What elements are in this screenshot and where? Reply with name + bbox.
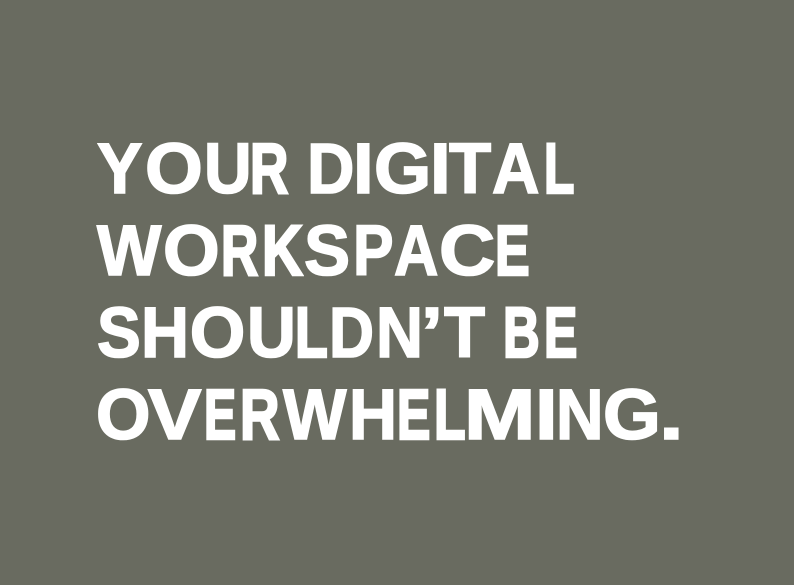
title line 1: R <box>250 128 288 208</box>
title line 2: P <box>353 210 394 290</box>
title line 1: I <box>353 128 373 208</box>
title line 2: W <box>97 210 161 290</box>
title line 2: O <box>163 210 219 290</box>
title line 3: B <box>503 293 540 373</box>
title line 2: S <box>304 210 351 290</box>
title line 4: W <box>283 375 346 455</box>
title line 1: Y <box>97 128 142 208</box>
title line 3: H <box>141 293 189 373</box>
title line 3: U <box>247 293 296 373</box>
title line 4: G <box>603 375 661 455</box>
title line 3: E <box>544 293 578 373</box>
title line 1: U <box>204 128 252 208</box>
title line 4: N <box>556 375 603 455</box>
title line 1: O <box>145 128 202 208</box>
title line 1: G <box>374 128 431 208</box>
title line 1: L <box>544 128 574 208</box>
title line 3: D <box>329 293 374 373</box>
title line 3: ’ <box>421 293 443 373</box>
title line 4: M <box>464 375 535 455</box>
title line 2: A <box>394 210 438 290</box>
title line 4: . <box>659 375 684 455</box>
title line 4: H <box>349 375 397 455</box>
title line 4: L <box>434 375 465 455</box>
title line 2 <box>96 210 530 290</box>
title line 4: O <box>96 375 150 455</box>
title line 3: T <box>444 293 485 373</box>
title line 3: L <box>295 293 327 373</box>
title line 3: N <box>376 293 423 373</box>
title line 4: V <box>148 375 201 455</box>
title line 3: S <box>96 293 140 373</box>
title line 1: T <box>449 128 492 208</box>
title line 2: K <box>262 210 302 290</box>
title line 4: I <box>535 375 558 455</box>
title line 3: O <box>190 293 245 373</box>
title line 1: A <box>492 128 539 208</box>
title line 2: C <box>439 210 495 290</box>
title line 1 <box>97 128 574 208</box>
title line 1: I <box>430 128 450 208</box>
title line 2: E <box>495 210 530 290</box>
title line 3 <box>96 293 578 373</box>
title line 4: R <box>240 375 279 455</box>
title line 4: E <box>204 375 236 455</box>
title line 4: E <box>397 375 431 455</box>
title <box>96 128 684 455</box>
title line 1: D <box>307 128 354 208</box>
title line 4 <box>96 375 684 455</box>
title line 2: R <box>221 210 258 290</box>
